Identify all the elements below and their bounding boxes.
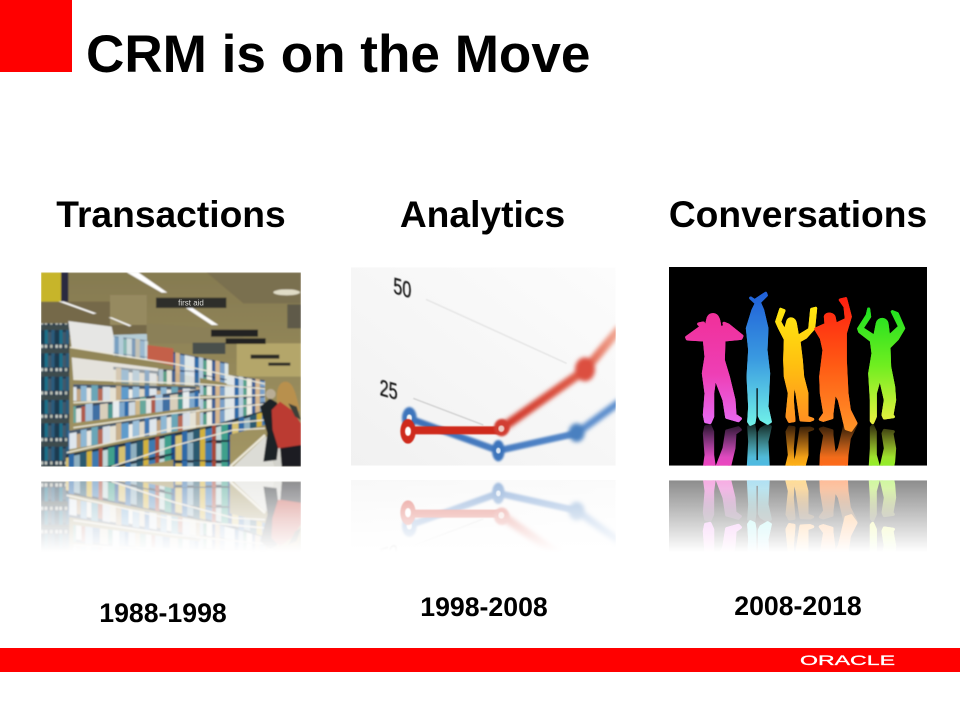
red corner square (0, 0, 72, 72)
reflection: colorful dancers (669, 480, 927, 547)
heading: Analytics: Analytics (400, 193, 565, 235)
title: CRM is on the Move (86, 25, 590, 84)
date: 2008-2018: 2008-2018 (734, 591, 862, 621)
reflection: line chart (400, 480, 616, 545)
date: 1988-1998: 1988-1998 (99, 598, 227, 628)
photo: store aisle (41, 272, 301, 481)
footer red bar (0, 648, 960, 672)
date: 1998-2008: 1998-2008 (420, 592, 548, 622)
photo: colorful dancers (669, 267, 927, 555)
photo: line chart (351, 267, 620, 466)
heading: Conversations: Conversations (669, 193, 927, 235)
reflection: store aisle (41, 481, 301, 546)
logo: ORACLE: ORACLE (800, 652, 895, 668)
heading: Transactions: Transactions (56, 193, 286, 235)
